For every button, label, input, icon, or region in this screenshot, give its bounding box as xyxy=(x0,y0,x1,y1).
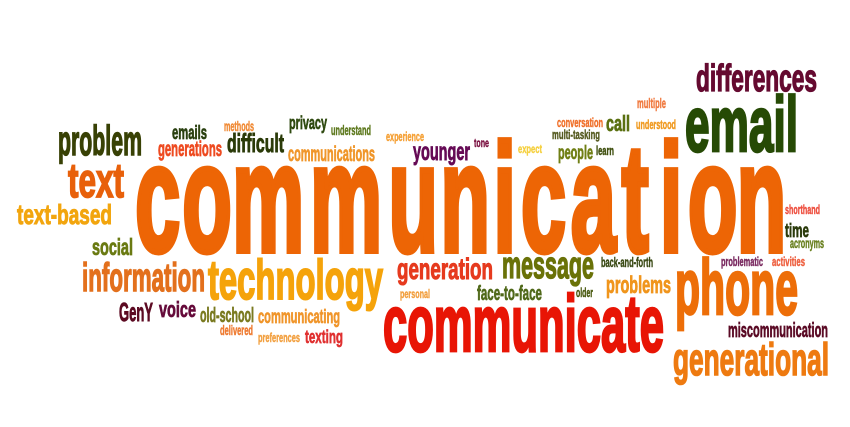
word: message: message xyxy=(502,245,594,287)
word: face-to-face: face-to-face xyxy=(477,283,542,305)
word: privacy: privacy xyxy=(289,113,327,133)
word: preferences: preferences xyxy=(258,330,300,345)
word: conversation: conversation xyxy=(557,116,603,130)
word: communicating: communicating xyxy=(258,307,340,328)
word: texting: texting xyxy=(305,327,343,347)
word: learn: learn xyxy=(596,143,614,158)
word: expect: expect xyxy=(518,142,542,156)
word: old-school: old-school xyxy=(200,305,254,327)
word: activities: activities xyxy=(772,254,805,269)
word: GenY: GenY xyxy=(119,297,153,327)
word: older: older xyxy=(576,285,593,300)
word: generations: generations xyxy=(158,138,222,161)
word: emails: emails xyxy=(172,123,207,144)
word: problematic: problematic xyxy=(721,254,763,269)
word: people: people xyxy=(558,143,593,164)
word: experience: experience xyxy=(386,130,424,144)
word: understood: understood xyxy=(636,117,676,132)
word: delivered: delivered xyxy=(220,323,253,338)
word: multiple: multiple xyxy=(637,96,666,111)
word: understand: understand xyxy=(331,123,371,138)
word: time: time xyxy=(785,221,809,242)
word: back-and-forth: back-and-forth xyxy=(601,255,653,270)
word: younger: younger xyxy=(413,138,470,166)
word: information: information xyxy=(82,256,205,300)
word: text-based: text-based xyxy=(17,199,112,230)
word: voice: voice xyxy=(159,297,196,322)
word: generation: generation xyxy=(397,253,493,286)
word: methods: methods xyxy=(224,119,254,134)
word: difficult: difficult xyxy=(227,128,284,158)
word: communications: communications xyxy=(288,143,375,166)
word: text: text xyxy=(68,155,124,208)
word: problem: problem xyxy=(58,117,142,164)
word: shorthand: shorthand xyxy=(785,203,820,217)
word: communication: communication xyxy=(135,112,786,283)
word: social: social xyxy=(92,234,133,260)
word: technology: technology xyxy=(208,248,383,311)
word: multi-tasking: multi-tasking xyxy=(552,127,600,142)
word: tone: tone xyxy=(474,136,489,150)
word: problems: problems xyxy=(606,272,671,299)
word: personal: personal xyxy=(400,287,430,301)
word: call: call xyxy=(606,111,630,136)
